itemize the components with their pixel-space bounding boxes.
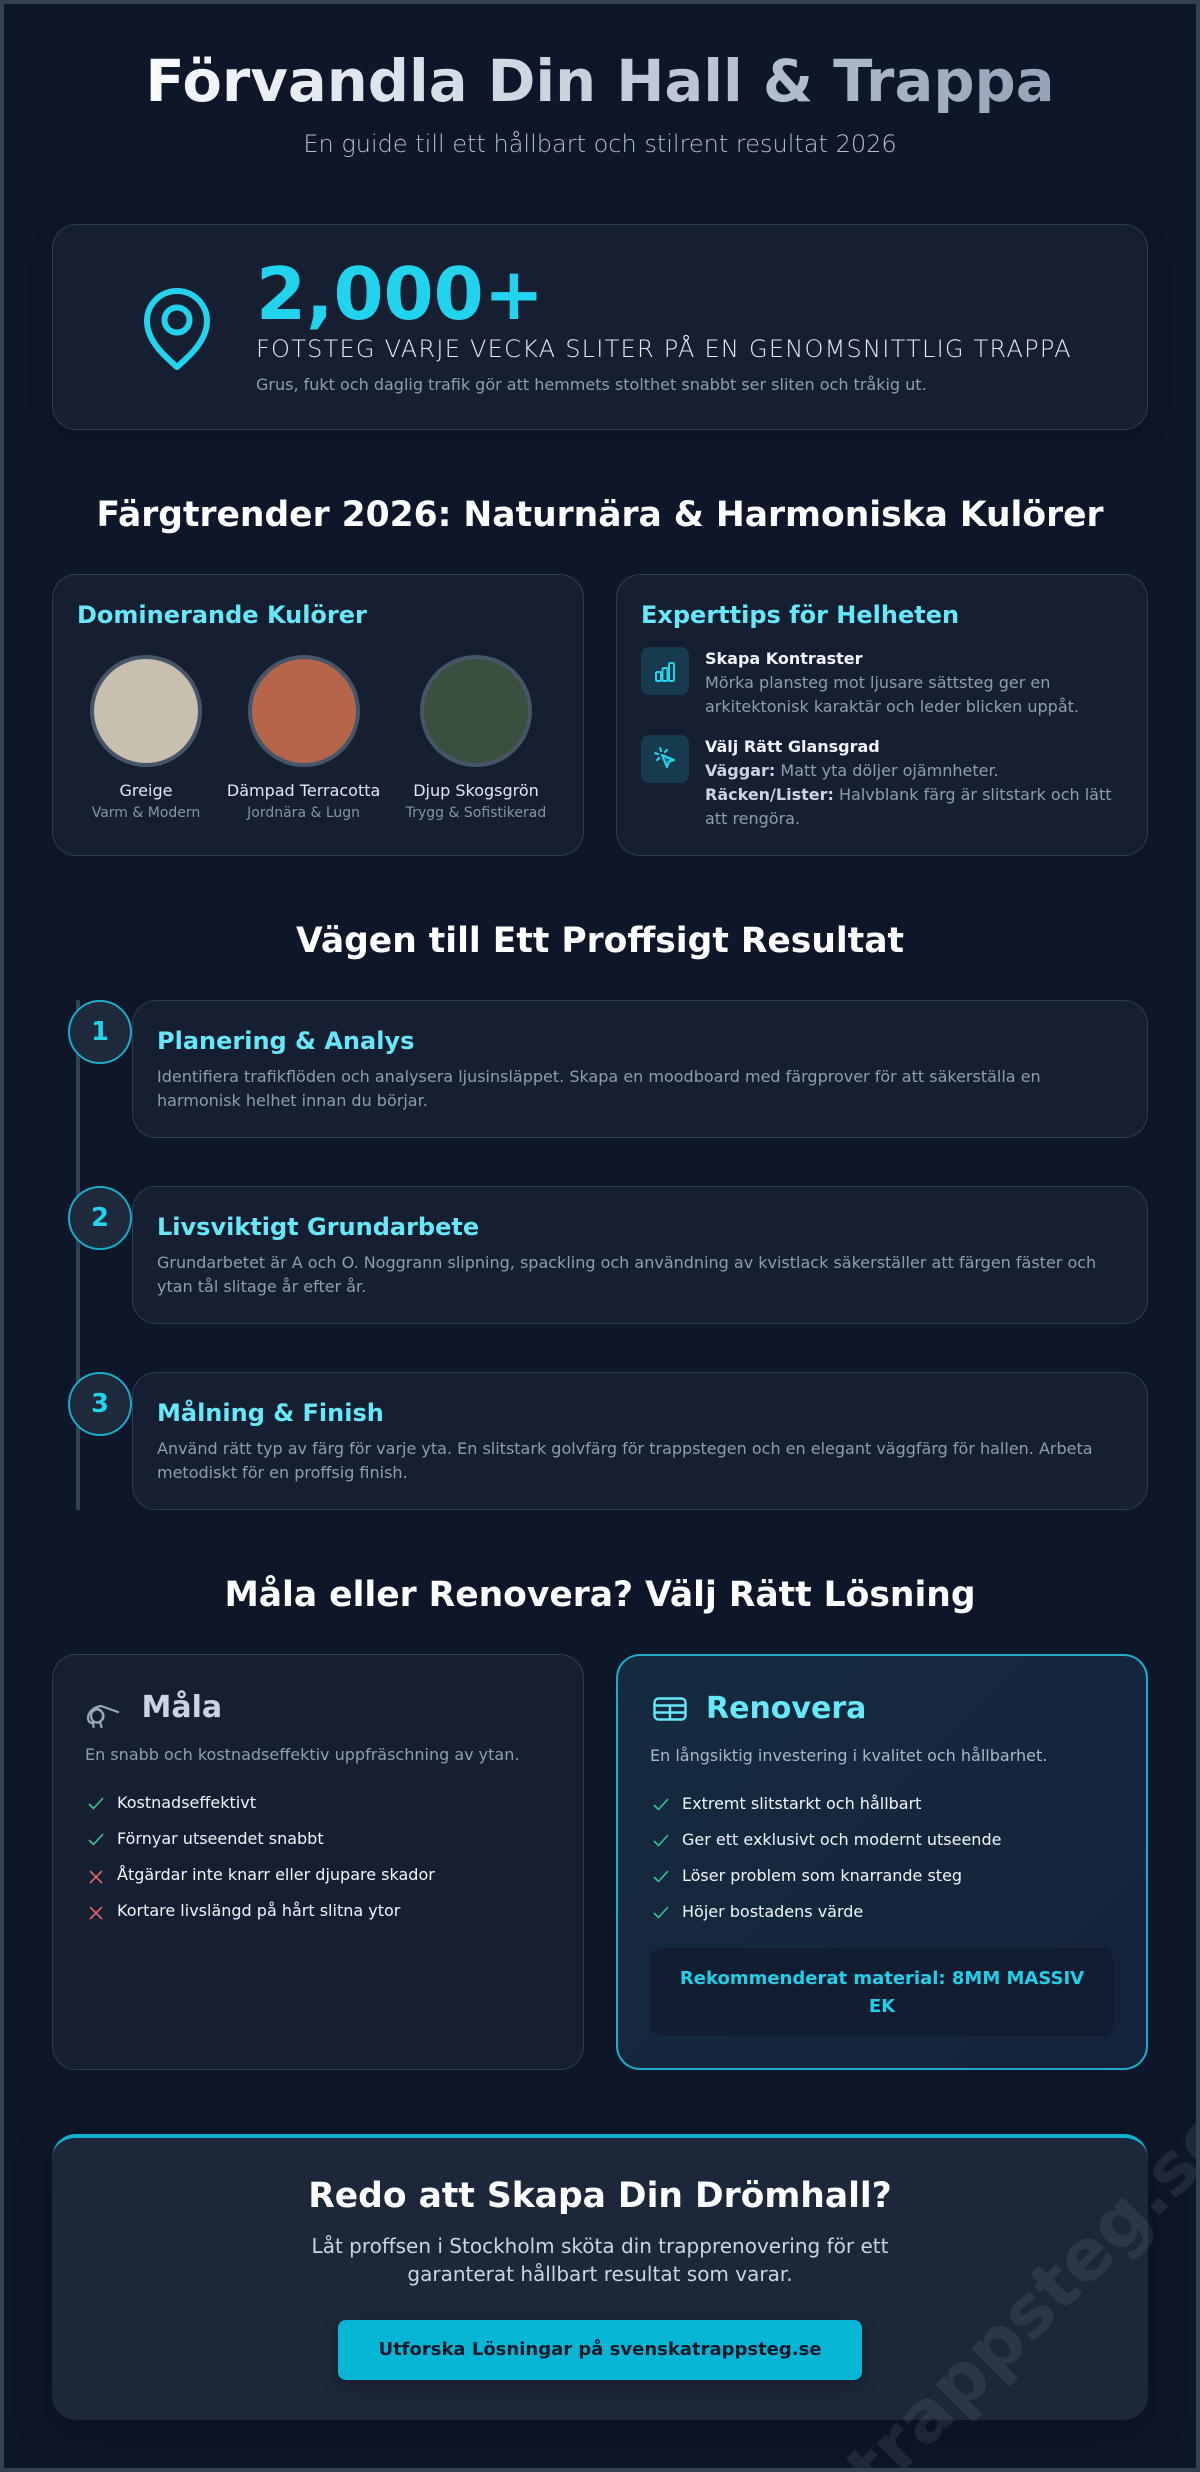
step number: 1 bbox=[91, 1017, 109, 1047]
cta heading: Redo att Skapa Din Drömhall? bbox=[308, 2176, 892, 2216]
icon: map pin bbox=[144, 288, 210, 370]
list item: Förnyar utseendet snabbt bbox=[117, 1828, 324, 1848]
list item: Extremt slitstarkt och hållbart bbox=[682, 1794, 921, 1812]
stat description: Grus, fukt och daglig trafik gör att hemmets stolthet snabbt ser sliten och tråkig ut. bbox=[256, 375, 927, 394]
panel: renovate option bbox=[616, 1654, 1148, 2070]
swatch: greige: Greige bbox=[120, 780, 172, 800]
tip text: att rengöra. bbox=[705, 808, 800, 828]
subtitle: En guide till ett hållbart och stilrent resultat 2026 bbox=[303, 130, 897, 158]
stat label: FOTSTEG VARJE VECKA SLITER PÅ EN GENOMSNITTLIG TRAPPA bbox=[256, 335, 1072, 363]
step text: Använd rätt typ av färg för varje yta. En slitstark golvfärg för trappstegen och en elegant väggfärg för hallen. Arbeta bbox=[157, 1438, 1093, 1458]
panel heading: Experttips för Helheten bbox=[641, 600, 959, 628]
icon: bars bbox=[641, 647, 689, 695]
recommended material box bbox=[650, 1948, 1114, 2036]
recommended text: EK bbox=[869, 1996, 895, 2016]
step number bbox=[68, 1000, 132, 1064]
step card bbox=[132, 1372, 1148, 1510]
cta button bbox=[338, 2320, 862, 2380]
tip: contrasts bbox=[641, 647, 1079, 716]
list item: Löser problem som knarrande steg bbox=[682, 1866, 962, 1884]
timeline line bbox=[76, 1000, 80, 1510]
tip: gloss bbox=[641, 735, 1112, 828]
icon: cursor click bbox=[641, 735, 689, 783]
step number: 3 bbox=[91, 1389, 109, 1419]
panel heading: Dominerande Kulörer bbox=[77, 600, 367, 628]
step 3 bbox=[68, 1372, 1148, 1510]
list item: Höjer bostadens värde bbox=[682, 1902, 863, 1920]
panel: expert tips bbox=[616, 574, 1148, 856]
list item: Kostnadseffektivt bbox=[117, 1792, 256, 1812]
option title: Måla bbox=[142, 1690, 222, 1724]
step text: Identifiera trafikflöden och analysera ljusinsläppet. Skapa en moodboard med färgprover för att säkerställa en bbox=[157, 1066, 1041, 1086]
tip text: arkitektonisk karaktär och leder blicken uppåt. bbox=[705, 696, 1079, 716]
cta text: garanterat hållbart resultat som varar. bbox=[407, 2262, 793, 2286]
option description: En snabb och kostnadseffektiv uppfräschning av ytan. bbox=[85, 1744, 519, 1764]
swatch: forest green bbox=[406, 655, 546, 821]
icon: tread table bbox=[653, 1697, 687, 1721]
cta text bbox=[312, 2234, 888, 2286]
tip text bbox=[705, 648, 1079, 716]
stat number: 2,000+ bbox=[256, 252, 544, 336]
tip text: Räcken/Lister: Halvblank färg är slitstark och lätt bbox=[705, 784, 1112, 804]
step text: harmonisk helhet innan du börjar. bbox=[157, 1090, 428, 1110]
option title: Renovera bbox=[706, 1690, 866, 1726]
step text: ytan tål slitage år efter år. bbox=[157, 1276, 366, 1296]
title: Förvandla Din Hall & Trappa bbox=[145, 48, 1055, 115]
step text bbox=[157, 1252, 1096, 1296]
recommended text bbox=[680, 1968, 1084, 2016]
step title: Livsviktigt Grundarbete bbox=[157, 1213, 479, 1241]
step title: Planering & Analys bbox=[157, 1027, 414, 1055]
step text: Grundarbetet är A och O. Noggrann slipning, spackling och användning av kvistlack säkerställer att färgen fäster och bbox=[157, 1252, 1096, 1272]
icon: paint roller bbox=[86, 1704, 120, 1728]
heading: compare: Måla eller Renovera? Välj Rätt Lösning bbox=[224, 1575, 976, 1615]
step card bbox=[132, 1186, 1148, 1324]
tip text: Välj Rätt Glansgrad bbox=[705, 736, 880, 756]
panel: dominant colors bbox=[52, 574, 584, 856]
recommended text: Rekommenderat material: 8MM MASSIV bbox=[680, 1968, 1084, 1988]
heading: process: Vägen till Ett Proffsigt Resultat bbox=[296, 920, 904, 960]
swatch: greige bbox=[90, 655, 202, 821]
swatch: terracotta: Jordnära & Lugn bbox=[247, 805, 360, 821]
swatch: forest green: Trygg & Sofistikerad bbox=[406, 805, 546, 821]
heading: color trends: Färgtrender 2026: Naturnära & Harmoniska Kulörer bbox=[96, 495, 1104, 535]
step text bbox=[157, 1438, 1093, 1482]
swatch: forest green: Djup Skogsgrön bbox=[413, 780, 539, 800]
swatch: greige: Varm & Modern bbox=[92, 805, 200, 821]
panel: hero stat bbox=[52, 224, 1148, 430]
step number bbox=[68, 1186, 132, 1250]
cta text: Låt proffsen i Stockholm sköta din trapprenovering för ett bbox=[312, 2234, 888, 2258]
step 1 bbox=[68, 1000, 1148, 1138]
panel: paint option bbox=[52, 1654, 584, 2070]
cta button: Utforska Lösningar på svenskatrappsteg.se bbox=[378, 2339, 822, 2360]
option description: En långsiktig investering i kvalitet och hållbarhet. bbox=[650, 1746, 1047, 1764]
tip text: Mörka plansteg mot ljusare sättsteg ger en bbox=[705, 672, 1050, 692]
tip text bbox=[705, 736, 1112, 828]
step card bbox=[132, 1000, 1148, 1138]
list item: Ger ett exklusivt och modernt utseende bbox=[682, 1830, 1001, 1848]
swatch: terracotta bbox=[227, 655, 380, 821]
tip text: Väggar: Matt yta döljer ojämnheter. bbox=[705, 760, 999, 780]
step 2 bbox=[68, 1186, 1148, 1324]
step number: 2 bbox=[91, 1203, 109, 1233]
list item: Åtgärdar inte knarr eller djupare skador bbox=[117, 1864, 435, 1884]
list item: Kortare livslängd på hårt slitna ytor bbox=[117, 1900, 400, 1920]
tip text: Skapa Kontraster bbox=[705, 648, 863, 668]
panel: call to action bbox=[52, 2134, 1148, 2420]
step number bbox=[68, 1372, 132, 1436]
swatch: terracotta: Dämpad Terracotta bbox=[227, 780, 380, 800]
step title: Målning & Finish bbox=[157, 1399, 384, 1427]
step text bbox=[157, 1066, 1041, 1110]
step text: metodiskt för en proffsig finish. bbox=[157, 1462, 408, 1482]
